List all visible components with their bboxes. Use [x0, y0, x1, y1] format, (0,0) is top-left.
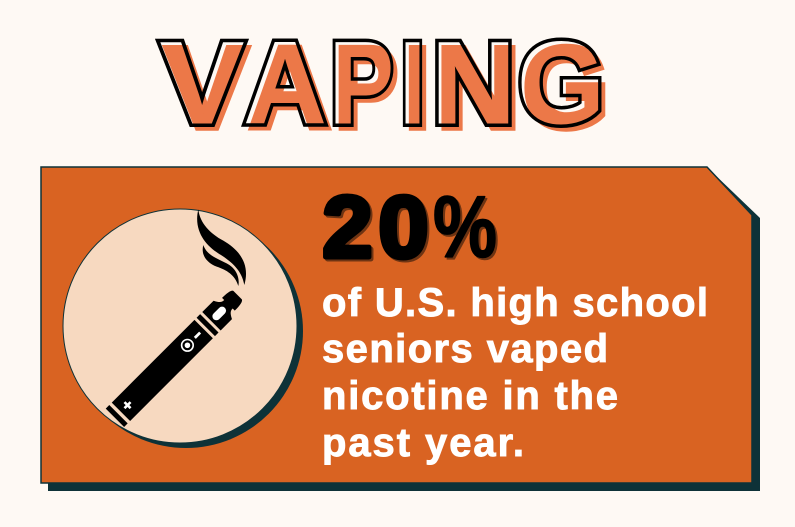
text block: description: of U.S. high school: [322, 281, 708, 325]
title: VAPING: P: [335, 24, 398, 152]
text block: description: seniors vaped: [322, 327, 608, 371]
panel: statistic card: [41, 167, 760, 491]
statistic: 20%: %: [433, 179, 497, 276]
text block: description: nicotine in the: [322, 374, 618, 418]
title: VAPING: A: [250, 24, 330, 152]
statistic: 20%: 0: [380, 181, 430, 278]
title: VAPING: [155, 38, 606, 132]
icon: smoke: [197, 209, 246, 286]
title: VAPING: N: [437, 24, 520, 152]
text block: description: past year.: [322, 421, 524, 465]
statistic: 20%: %: [435, 181, 499, 278]
statistic: 20%: 0: [378, 179, 428, 276]
icon: vape pen in circle: [63, 209, 303, 448]
statistic: 20%: [322, 179, 499, 278]
title: VAPING: G: [523, 24, 609, 152]
statistic: 20%: 2: [324, 181, 374, 278]
statistic: 20%: 2: [322, 179, 372, 276]
text block: description: [322, 281, 708, 465]
title: VAPING: I: [406, 24, 430, 152]
title: VAPING: V: [166, 24, 248, 152]
icon: vape pen: [106, 286, 247, 427]
